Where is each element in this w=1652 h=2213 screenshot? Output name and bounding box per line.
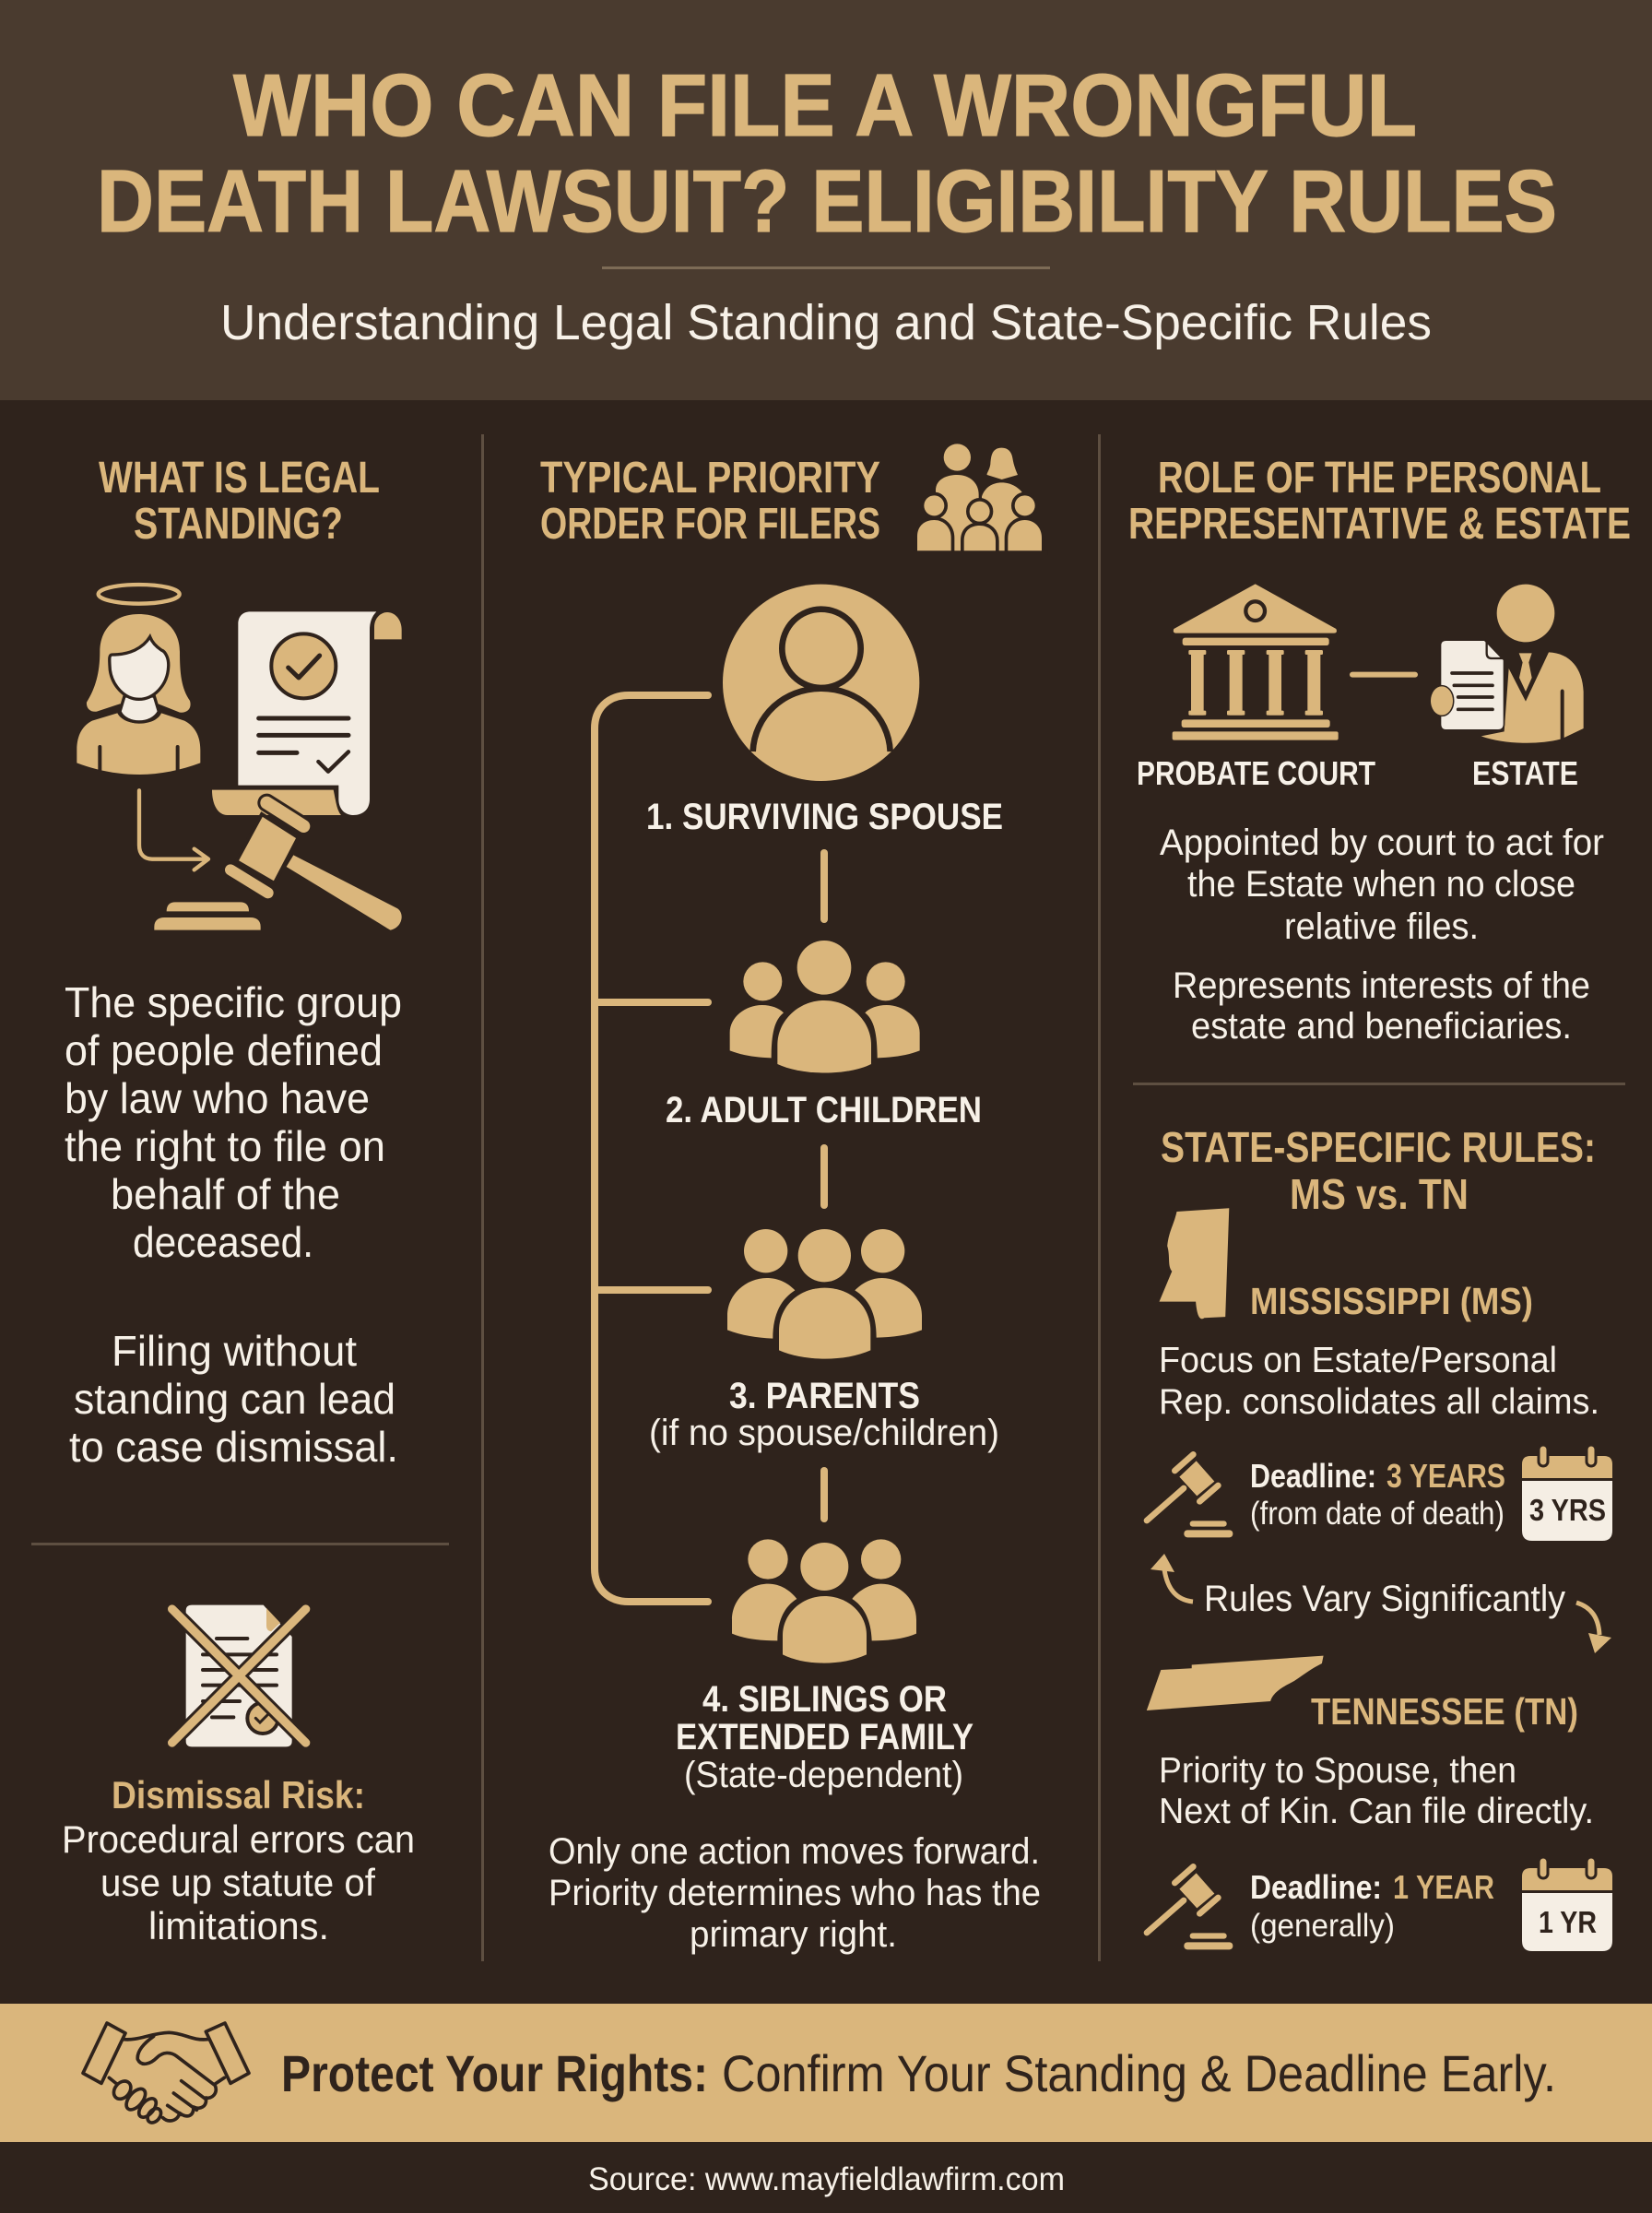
- icon: courthouse linked to representative: [1173, 584, 1584, 743]
- heading: state-specific rules: [1161, 1123, 1596, 1218]
- text: appointed by court: the Estate when no close: [1187, 864, 1575, 905]
- panel: what is legal standing: [31, 454, 449, 1947]
- labels: probate court and estate: ESTATE: [1472, 754, 1578, 792]
- text: definition of legal standing: The specific group: [65, 978, 402, 1026]
- arrow: up to Mississippi: [1150, 1554, 1193, 1602]
- heading: what is legal standing: WHAT IS LEGAL: [99, 454, 380, 503]
- text: Mississippi deadline: 3 YEARS: [1386, 1457, 1505, 1495]
- icon: Mississippi outline: [1160, 1208, 1229, 1319]
- text: dismissal risk: Procedural errors can: [62, 1817, 415, 1861]
- icon: deceased person, document and gavel: [77, 585, 402, 930]
- level 1: surviving spouse: 1. SURVIVING SPOUSE: [646, 797, 1003, 837]
- text: filing without standing: to case dismissal.: [69, 1423, 398, 1471]
- level 3: parents: (if no spouse/children): [649, 1413, 999, 1453]
- text: Mississippi rule: Rep. consolidates all claims.: [1159, 1382, 1599, 1422]
- labels: probate court and estate: [1137, 754, 1578, 792]
- text: only one action moves forward: [549, 1831, 1041, 1955]
- text: represents interests: estate and beneficiaries.: [1191, 1006, 1572, 1047]
- text: Mississippi deadline: [1250, 1457, 1505, 1532]
- panel: personal representative and state rules: [1128, 454, 1631, 1951]
- arrow: down to Tennessee: [1576, 1603, 1611, 1653]
- heading: state-specific rules: MS vs. TN: [1290, 1170, 1469, 1218]
- text: only one action moves forward: Priority determines who has the: [549, 1873, 1041, 1913]
- level 2: adult children: 2. ADULT CHILDREN: [666, 1090, 982, 1130]
- heading: typical priority order: [540, 454, 880, 549]
- text: protect your rights: [281, 2044, 1556, 2102]
- text: only one action moves forward: primary right.: [690, 1914, 897, 1955]
- icon: calendar 1 yr: [1522, 1857, 1612, 1951]
- text: dismissal risk: use up statute of: [100, 1861, 375, 1904]
- panel: typical priority order: [540, 444, 1048, 1955]
- text: definition of legal standing: behalf of the: [111, 1170, 340, 1218]
- level 1: surviving spouse: [646, 585, 1003, 837]
- icon: gavel: [1147, 1866, 1233, 1949]
- heading: what is legal standing: [99, 454, 380, 549]
- heading: typical priority order: TYPICAL PRIORITY: [540, 454, 880, 503]
- text: dismissal risk: limitations.: [148, 1904, 329, 1947]
- footer band: [0, 2004, 1652, 2142]
- title: WHO CAN FILE A WRONGFUL: [233, 56, 1417, 155]
- icon: calendar 3 yrs: 3 YRS: [1529, 1493, 1606, 1527]
- Mississippi block: MISSISSIPPI (MS): [1250, 1280, 1533, 1322]
- heading: role of the personal representative: [1128, 454, 1631, 549]
- icon: calendar 1 yr: 1 YR: [1539, 1905, 1597, 1939]
- icon: calendar 3 yrs: [1522, 1445, 1612, 1541]
- subtitle: Understanding Legal Standing and State-Specific Rules: [220, 295, 1432, 350]
- heading: what is legal standing: STANDING?: [134, 500, 343, 549]
- text: Tennessee deadline: 1 YEAR: [1393, 1868, 1494, 1906]
- icon: three people: [732, 1539, 916, 1663]
- text: Mississippi rule: Focus on Estate/Personal: [1159, 1341, 1557, 1380]
- text: definition of legal standing: the right to file on: [65, 1122, 385, 1170]
- level 2: adult children: [666, 941, 982, 1130]
- level 4: siblings or extended family: 4. SIBLINGS OR: [702, 1679, 947, 1720]
- text: Tennessee deadline: [1250, 1868, 1494, 1944]
- text: filing without standing: Filing without: [112, 1327, 357, 1375]
- icon: gavel: [1147, 1454, 1233, 1537]
- text: Tennessee rule: Next of Kin. Can file directly.: [1159, 1792, 1594, 1831]
- text: definition of legal standing: [65, 978, 402, 1266]
- text: Mississippi deadline: Deadline:: [1250, 1457, 1376, 1495]
- level 3: parents: [649, 1229, 999, 1453]
- level 4: siblings or extended family: EXTENDED FAMILY: [676, 1717, 974, 1757]
- Mississippi block: [1147, 1208, 1612, 1541]
- icon: single person: [723, 585, 919, 781]
- icon: crossed out document: [172, 1605, 306, 1746]
- text: definition of legal standing: of people defined: [65, 1026, 383, 1074]
- source line: Source: www.mayfieldlawfirm.com: [588, 2161, 1065, 2197]
- text: appointed by court: Appointed by court to act for: [1160, 822, 1604, 863]
- text: dismissal risk: [62, 1773, 415, 1947]
- text: only one action moves forward: Only one action moves forward.: [549, 1831, 1040, 1872]
- icon: three people: [730, 941, 920, 1072]
- text: filing without standing: [69, 1327, 398, 1471]
- text: represents interests: [1173, 965, 1590, 1047]
- text: Mississippi deadline: (from date of death): [1250, 1496, 1504, 1532]
- bracket connecting priority levels: [595, 695, 708, 1602]
- header panel: [0, 0, 1652, 400]
- level 4: siblings or extended family: [676, 1539, 974, 1795]
- icon: handshake: [83, 2023, 249, 2125]
- labels: probate court and estate: PROBATE COURT: [1137, 754, 1375, 792]
- level 4: siblings or extended family: (State-dependent): [684, 1755, 963, 1795]
- text: Mississippi rule: [1159, 1341, 1599, 1422]
- icon: family: [913, 444, 1048, 555]
- text: protect your rights: Protect Your Rights:: [281, 2044, 708, 2102]
- text: represents interests: Represents interests of the: [1173, 965, 1590, 1006]
- level 3: parents: 3. PARENTS: [729, 1376, 920, 1416]
- text: Tennessee rule: [1159, 1751, 1594, 1831]
- text: rules vary significantly: Rules Vary Significantly: [1204, 1579, 1565, 1619]
- icon: three people: [727, 1229, 922, 1359]
- text: dismissal risk: Dismissal Risk:: [112, 1773, 365, 1817]
- heading: typical priority order: ORDER FOR FILERS: [540, 500, 880, 549]
- Tennessee block: TENNESSEE (TN): [1311, 1690, 1578, 1733]
- Tennessee block: [1147, 1656, 1612, 1951]
- text: definition of legal standing: deceased.: [133, 1218, 313, 1266]
- text: Tennessee deadline: Deadline:: [1250, 1868, 1382, 1906]
- icon: Tennessee outline: [1147, 1656, 1324, 1710]
- text: appointed by court: relative files.: [1284, 906, 1479, 947]
- text: definition of legal standing: by law who have: [65, 1074, 370, 1122]
- text: appointed by court: [1160, 822, 1604, 947]
- text: Tennessee deadline: (generally): [1250, 1908, 1395, 1944]
- text: Tennessee rule: Priority to Spouse, then: [1159, 1751, 1516, 1791]
- text: protect your rights: Confirm Your Standing & Deadline Early.: [722, 2044, 1556, 2102]
- title: [97, 56, 1557, 251]
- text: filing without standing: standing can lead: [74, 1375, 395, 1423]
